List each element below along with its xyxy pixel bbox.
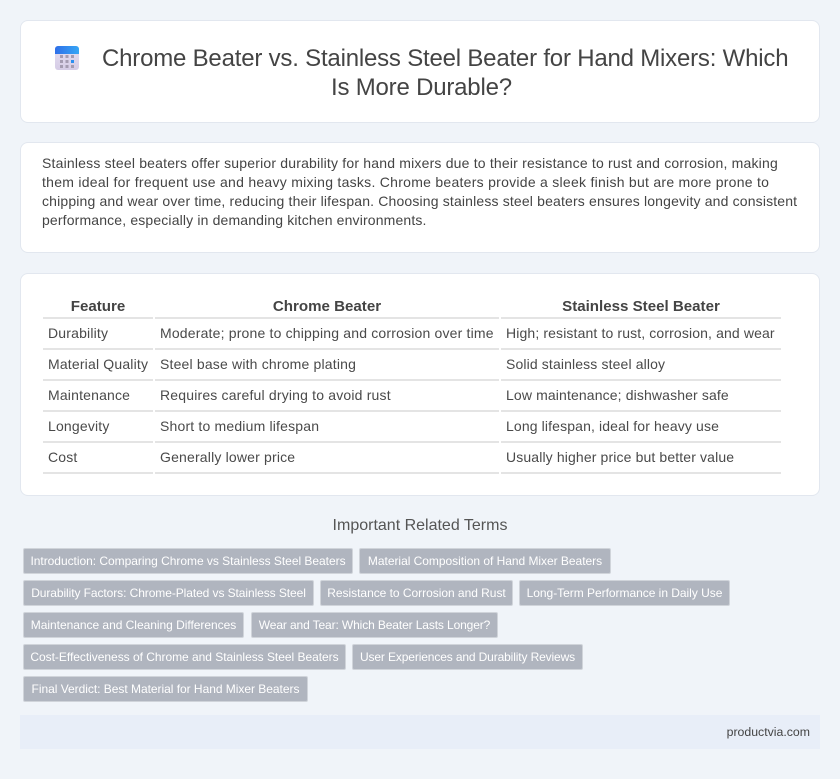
comparison table: Material Quality <box>48 356 148 372</box>
table card <box>20 273 820 496</box>
comparison table: Requires careful drying to avoid rust <box>160 387 391 403</box>
comparison table: Moderate; prone to chipping and corrosion over time <box>160 325 494 341</box>
comparison table: Usually higher price but better value <box>506 449 734 465</box>
icon: calendar <box>55 46 79 70</box>
comparison table: Steel base with chrome plating <box>160 356 356 372</box>
intro text: performance, especially in demanding kitchen environments. <box>42 212 427 228</box>
comparison table: Chrome Beater <box>273 298 381 315</box>
comparison table: Long lifespan, ideal for heavy use <box>506 418 719 434</box>
comparison table <box>43 298 781 474</box>
comparison table: Feature <box>71 298 125 315</box>
related terms tags: Resistance to Corrosion and Rust <box>327 586 506 600</box>
intro card <box>20 142 820 253</box>
related terms tags: Maintenance and Cleaning Differences <box>31 618 236 632</box>
related terms tags: Final Verdict: Best Material for Hand Mixer Beaters <box>32 682 299 696</box>
comparison table: Short to medium lifespan <box>160 418 319 434</box>
heading line 2: Is More Durable? <box>331 74 512 101</box>
title card <box>20 20 820 123</box>
comparison table: Longevity <box>48 418 110 434</box>
comparison table: Stainless Steel Beater <box>562 298 720 315</box>
comparison table: High; resistant to rust, corrosion, and wear <box>506 325 775 341</box>
footer source: productvia.com <box>727 725 810 739</box>
related terms tags <box>23 548 730 702</box>
comparison table: Maintenance <box>48 387 130 403</box>
footer bar <box>20 715 820 749</box>
comparison table: Durability <box>48 325 108 341</box>
related terms tags: User Experiences and Durability Reviews <box>360 650 575 664</box>
related terms tags: Long-Term Performance in Daily Use <box>527 586 722 600</box>
related terms tags: Cost-Effectiveness of Chrome and Stainless Steel Beaters <box>30 650 339 664</box>
intro text: them ideal for frequent use and heavy mixing tasks. Chrome beaters provide a sleek finish but are more prone to <box>42 174 769 190</box>
comparison table: Low maintenance; dishwasher safe <box>506 387 729 403</box>
comparison table: Solid stainless steel alloy <box>506 356 665 372</box>
comparison table: Generally lower price <box>160 449 295 465</box>
intro text: Stainless steel beaters offer superior durability for hand mixers due to their resistance to rust and corrosion, making <box>42 155 778 171</box>
heading: Chrome Beater vs. Stainless Steel Beater for Hand Mixers: Which <box>102 45 788 72</box>
related terms tags: Wear and Tear: Which Beater Lasts Longer? <box>259 618 490 632</box>
related terms tags: Introduction: Comparing Chrome vs Stainless Steel Beaters <box>30 554 346 568</box>
related terms tags: Material Composition of Hand Mixer Beaters <box>368 554 602 568</box>
related terms heading: Important Related Terms <box>333 517 507 534</box>
intro text <box>42 155 797 228</box>
related terms tags: Durability Factors: Chrome-Plated vs Stainless Steel <box>31 586 306 600</box>
comparison table: Cost <box>48 449 78 465</box>
intro text: chipping and wear over time, reducing their lifespan. Choosing stainless steel beaters ensures longevity and consistent <box>42 193 797 209</box>
